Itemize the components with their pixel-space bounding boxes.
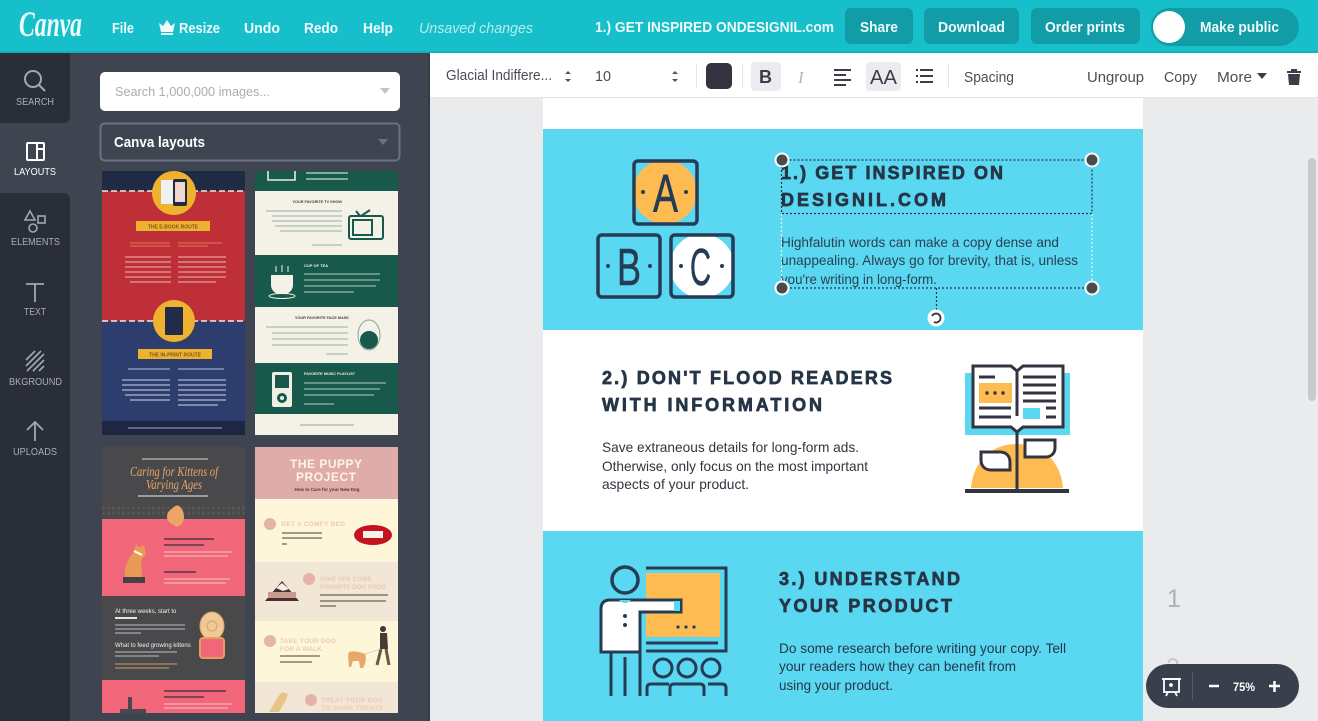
copy: Copy <box>1164 69 1197 86</box>
step two line two: FAVORITE DOG FOOD <box>320 584 386 591</box>
icon: face mask <box>358 320 380 350</box>
logo: Canva <box>19 4 82 44</box>
step four: TREAT YOUR DOG <box>321 697 383 704</box>
menu: redo: Redo <box>304 20 338 37</box>
top bar <box>0 0 1318 53</box>
uppercase button <box>866 62 901 91</box>
thumbnail: kittens infographic: At three weeks, start to <box>115 609 177 615</box>
panel edge <box>428 53 430 721</box>
icon: layouts <box>27 143 44 160</box>
thumbnail title: THE PUPPY <box>290 457 362 471</box>
thumbnail: kittens infographic: What to feed growing kittens <box>115 643 191 649</box>
thumbnail title: Caring for Kittens of <box>130 465 220 480</box>
step three: TAKE YOUR DOG <box>280 638 336 645</box>
body copy 1 <box>781 234 1078 287</box>
icon: cup <box>269 265 295 298</box>
icon: presenter at board <box>601 567 726 696</box>
icon: abc blocks: C <box>690 239 711 297</box>
icon: bone <box>269 692 288 712</box>
menu: undo: Undo <box>244 20 280 37</box>
document title: 1.) GET INSPIRED ONDESIGNIL.com <box>595 19 834 36</box>
step one: GET A COMFY BED <box>281 521 345 528</box>
icon: dog walker <box>348 626 389 668</box>
ungroup: Ungroup <box>1087 69 1144 86</box>
selection frame <box>776 154 1098 326</box>
label: uploads: UPLOADS <box>13 447 57 458</box>
page number 2: 2 <box>1166 654 1180 682</box>
divider <box>1192 672 1194 700</box>
zoom control <box>1146 664 1299 708</box>
thumbnail: favourites infographic: FAVORITE MUSIC PLAYLIST <box>304 372 356 376</box>
body copy 2 <box>602 439 868 492</box>
icon: abc blocks <box>598 160 734 298</box>
button: share: Share <box>860 19 898 36</box>
thumbnail: favourites infographic: CUP OF TEA <box>304 263 328 268</box>
section 3 band <box>543 531 1143 721</box>
button: order prints: Order prints <box>1045 19 1125 36</box>
body copy 2: aspects of your product. <box>602 476 749 492</box>
thumbnail subtitle: Varying Ages <box>146 478 202 493</box>
body copy 3 <box>779 640 1066 693</box>
icon: abc blocks: A <box>653 164 678 224</box>
toggle: make public: Make public <box>1200 19 1279 36</box>
icon: music player <box>272 372 292 407</box>
thumbnail title line two: PROJECT <box>296 470 357 484</box>
icon: trash <box>1287 69 1301 85</box>
font spinner <box>565 71 571 82</box>
list icon <box>916 70 933 82</box>
label: layouts: LAYOUTS <box>14 167 56 178</box>
page number 1: 1 <box>1167 585 1181 613</box>
heading 1 line two: DESIGNIL.COM <box>781 190 946 210</box>
toggle: make public <box>1151 8 1299 46</box>
scrollbar <box>1308 158 1316 401</box>
body copy 2: Otherwise, only focus on the most important <box>602 458 868 474</box>
sidebar navigation <box>0 53 70 721</box>
icon: open book plant <box>965 366 1070 491</box>
label: elements: ELEMENTS <box>11 237 60 248</box>
font family selector: Glacial Indiffere... <box>446 67 552 84</box>
body copy 1: Highfalutin words can make a copy dense and <box>781 234 1059 250</box>
icon: elements <box>25 211 45 232</box>
separators <box>696 64 948 88</box>
more arrow <box>1257 73 1267 79</box>
layouts dropdown <box>100 124 400 160</box>
icon: kennel <box>265 581 299 601</box>
section 2 <box>602 366 1070 492</box>
thumbnail: puppy project infographic <box>255 447 398 713</box>
align icon <box>834 70 851 85</box>
icon: uploads <box>27 422 43 441</box>
uppercase button: AA <box>870 67 898 89</box>
step two: GIVE HIM SOME <box>320 576 373 583</box>
thumbnail: book infographic: THE IN-PRINT ROUTE <box>149 352 202 358</box>
step four line two: TO SOME TREATS <box>321 705 384 712</box>
icon: abc blocks: B <box>617 239 641 297</box>
button: download: Download <box>938 19 1005 36</box>
body copy 3: using your product. <box>779 677 893 693</box>
heading 3: 3.) UNDERSTAND <box>779 569 960 589</box>
thumbnail: book infographic: THE E-BOOK ROUTE <box>148 224 199 230</box>
icon: dog bed <box>354 525 392 545</box>
body copy 1: unappealing. Always go for brevity, that is, unless <box>781 252 1078 268</box>
canvas background <box>430 98 1318 721</box>
status: unsaved changes: Unsaved changes <box>419 20 533 37</box>
icon: tv <box>349 210 383 239</box>
thumbnail: favourites infographic <box>255 171 398 435</box>
menu: help: Help <box>363 20 393 37</box>
search field <box>100 72 400 111</box>
thumbnail subtitle: How to Care for your New Dog <box>294 487 360 492</box>
menu: resize: Resize <box>179 20 220 37</box>
font size: 10 <box>595 68 611 85</box>
left panel background <box>70 53 430 721</box>
heading 1: 1.) GET INSPIRED ON <box>781 163 1003 183</box>
icon: cat <box>123 544 146 583</box>
body copy 1: you're writing in long-form. <box>781 271 937 287</box>
bold button <box>751 62 781 91</box>
thumbnail: favourites infographic: YOUR FAVORITE TV SHOW <box>292 200 342 204</box>
spacing: Spacing <box>964 69 1014 86</box>
heading 2 line two: WITH INFORMATION <box>602 395 822 415</box>
label: background: BKGROUND <box>9 377 62 388</box>
colour swatch <box>706 63 732 89</box>
text formatting toolbar <box>430 53 1318 98</box>
menu: file: File <box>112 20 134 37</box>
zoom in <box>1269 681 1280 692</box>
body copy 3: Do some research before writing your copy. Tell <box>779 640 1066 656</box>
body copy 2: Save extraneous details for long-form ads. <box>602 439 859 455</box>
italic button: I <box>797 68 805 87</box>
search field: Search 1,000,000 images... <box>115 84 270 99</box>
zoom level: 75% <box>1233 680 1255 694</box>
layouts dropdown: Canva layouts <box>114 134 205 151</box>
icon: search <box>25 71 45 91</box>
label: search: SEARCH <box>16 97 54 108</box>
zoom out <box>1209 685 1219 687</box>
icon: background <box>26 351 44 371</box>
size spinner <box>672 71 678 82</box>
thumbnail: kittens infographic <box>102 447 245 713</box>
button: share <box>845 8 913 44</box>
label: text: TEXT <box>24 307 46 318</box>
thumbnail: book infographic <box>102 171 245 435</box>
body copy 3: your readers how they can benefit from <box>779 658 1016 674</box>
document page <box>543 98 1143 721</box>
button: download <box>924 8 1019 44</box>
icon: text <box>26 284 44 302</box>
step three line two: FOR A WALK <box>280 646 322 653</box>
button: order prints <box>1031 8 1140 44</box>
bold button: B <box>759 67 772 87</box>
section 1 band <box>543 129 1143 330</box>
icon: food tin <box>200 612 224 658</box>
more: More <box>1217 69 1252 86</box>
thumbnail: favourites infographic: YOUR FAVORITE FACE MASK <box>295 316 349 320</box>
heading 2: 2.) DON'T FLOOD READERS <box>602 368 892 388</box>
icon: crown <box>159 20 175 35</box>
heading 3 line two: YOUR PRODUCT <box>779 596 952 616</box>
icon: present <box>1162 679 1181 696</box>
